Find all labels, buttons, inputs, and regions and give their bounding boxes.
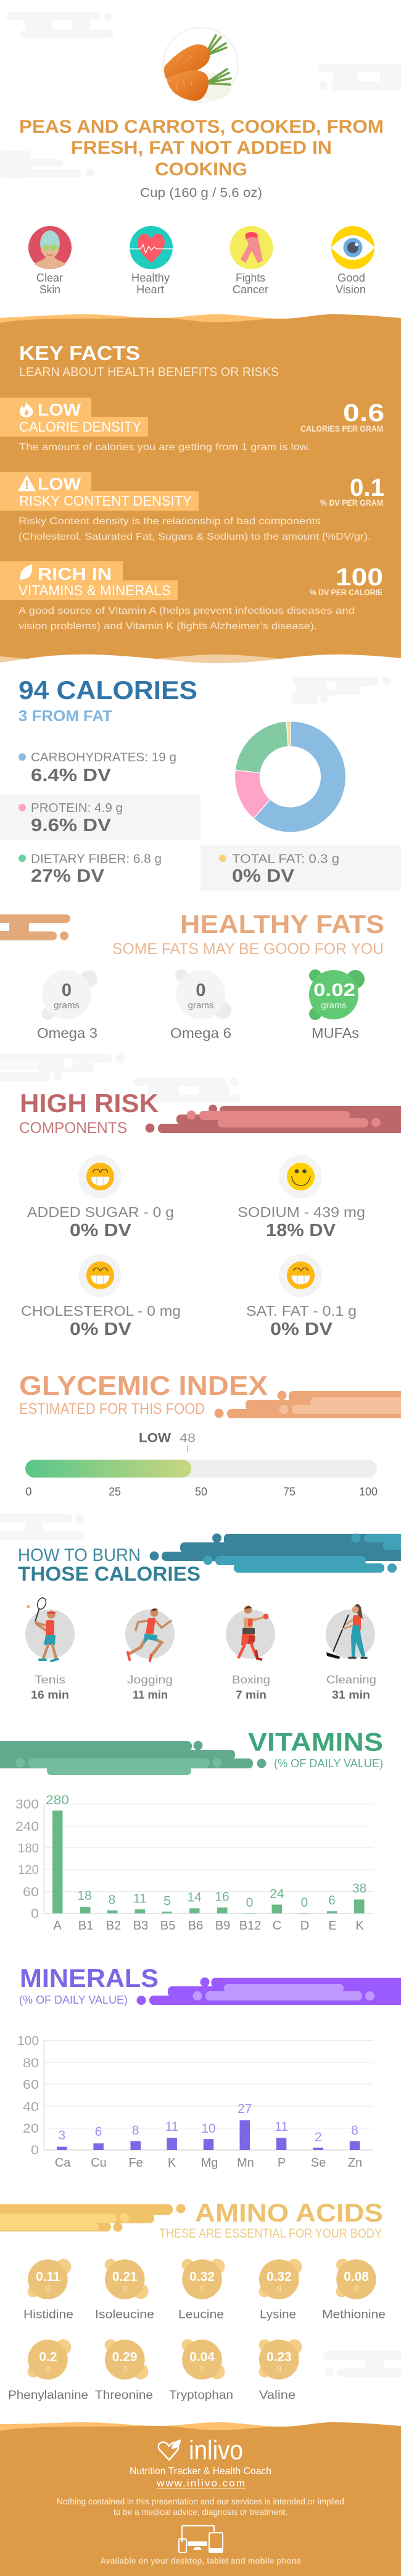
risk: sodium: SODIUM - 439 mg [238,1204,365,1220]
header background clouds [0,12,401,178]
bar chart: minerals: Zn [348,2156,362,2170]
bar chart: vitamins: A [53,1919,62,1933]
amino: valine [259,2339,302,2402]
amino: valine: Valine [259,2389,296,2402]
fat: omega 6: Omega 6 [170,1025,231,1041]
amino: isoleucine [95,2259,154,2321]
subheading: components: COMPONENTS [19,1119,127,1137]
amino: phenylalanine: Phenylalanine [8,2389,88,2402]
activity: boxing [226,1605,275,1701]
fact: calorie density: CALORIES PER GRAM [300,424,383,433]
calories section clouds [292,677,391,704]
benefit: clear skin [28,226,72,296]
bar chart: vitamins: B3 [133,1919,148,1933]
activity: jogging: 11 min [133,1689,168,1701]
title: PEAS AND CARROTS, COOKED, FROM [19,117,384,137]
amino: phenylalanine [8,2339,88,2402]
subheading: 3 from fat: 3 FROM FAT [19,708,112,725]
macro: dietary fiber [19,852,162,886]
section banner: burn calories [149,1534,401,1573]
amino: lysine: g [276,2282,281,2292]
activity: jogging: Jogging [127,1673,173,1686]
fat: mufas: grams [321,1000,347,1011]
bar chart: minerals: 8 [351,2123,358,2138]
section banner: amino acids [0,2204,185,2231]
risk: cholesterol: 0% DV [70,1319,132,1339]
title: COOKING [155,159,247,180]
amino: lysine [259,2259,302,2321]
amino: phenylalanine: 0.2 [39,2350,57,2364]
heading: key facts: KEY FACTS [19,342,140,364]
risk: sodium [238,1155,365,1240]
glycemic index gauge [25,1431,378,1498]
donut chart [235,721,346,832]
benefit: healthy heart [130,226,173,296]
amino: leucine: g [200,2282,204,2292]
fact: risky content density: RISKY CONTENT DENSITY [19,493,192,509]
bar chart: vitamins: C [273,1919,281,1933]
bar chart: vitamins: 280 [46,1793,69,1807]
section banner: minerals [137,1977,401,2005]
bar chart: vitamins: B1 [78,1919,93,1933]
amino: leucine: Leucine [178,2308,224,2321]
benefit: clear skin: Skin [39,283,60,296]
bar chart: minerals: K [168,2156,176,2170]
risk: saturated fat [246,1254,357,1339]
subheading: key facts: LEARN ABOUT HEALTH BENEFITS OR RISKS [19,366,279,379]
availability note: Available on your desktop, tablet and mobile phone [100,2556,301,2566]
heading: how to burn: HOW TO BURN [18,1545,141,1565]
subheading: vitamins: (% OF DAILY VALUE) [274,1757,383,1770]
heading: those calories: THOSE CALORIES [18,1563,200,1585]
fat: mufas: MUFAs [312,1025,359,1041]
bar chart: minerals: 2 [315,2130,322,2144]
bar chart: vitamins: 8 [109,1893,115,1907]
benefit: good vision: Vision [336,283,366,296]
amino: methionine [322,2259,386,2321]
bar chart: vitamins: 0 [246,1896,253,1910]
activity: jogging [125,1608,175,1701]
benefit: fights cancer: Fights [236,272,265,284]
bar chart: minerals: 6 [95,2125,102,2139]
glycemic index gauge: 50 [195,1486,207,1498]
bar chart: vitamins: 14 [187,1890,202,1904]
subheading: minerals: (% OF DAILY VALUE) [19,1994,128,2006]
activity: tennis [25,1597,75,1701]
amino: leucine [178,2259,225,2321]
tagline: Nutrition Tracker & Health Coach [130,2466,271,2477]
section banner: healthy fats [0,914,70,940]
bar chart: minerals: 40 [23,2100,39,2114]
bar chart: vitamins: K [355,1919,364,1933]
heading: healthy fats: HEALTHY FATS [180,910,384,939]
benefit: good vision [331,226,374,296]
fat: omega 6 [170,969,231,1041]
bar chart: vitamins: B5 [160,1919,175,1933]
fact: rich in vitamins and minerals: A good source of Vitamin A (helps prevent infectious diseases and [19,606,355,616]
bar chart: minerals: 27 [238,2102,252,2116]
macro: carbohydrates: 6.4% DV [31,766,112,785]
panel: key facts [0,314,401,663]
amino: histidine [23,2259,73,2321]
amino: histidine: 0.11 [36,2270,60,2284]
bar chart: minerals: Se [311,2156,326,2170]
benefit: clear skin: Clear [36,272,63,284]
burn section cloud [0,1514,86,1540]
macro: total fat: TOTAL FAT: 0.3 g [232,852,339,866]
glycemic index gauge: 100 [359,1486,378,1498]
section banner: high risk [146,1105,401,1133]
amino section cloud [323,2351,401,2377]
bar chart: vitamins: 6 [328,1893,336,1908]
heading: glycemic index: GLYCEMIC INDEX [19,1371,268,1401]
amino: tryptophan: 0.04 [189,2350,215,2364]
amino: threonine: 0.29 [112,2350,137,2364]
bar chart: vitamins [15,1793,373,1933]
amino: valine: 0.23 [267,2350,292,2364]
risk: added sugar: ADDED SUGAR - 0 g [27,1204,174,1220]
activity: cleaning [326,1604,376,1701]
amino: histidine: g [46,2282,50,2292]
amino: methionine: Methionine [322,2308,386,2321]
bar chart: minerals: Mg [201,2156,218,2170]
activity: boxing: 7 min [236,1689,267,1701]
high risk clouds [0,1054,241,1103]
risk: added sugar [27,1155,174,1240]
benefit: fights cancer: Cancer [233,283,268,296]
fact: calorie density: CALORIE DENSITY [19,419,141,435]
amino: tryptophan [169,2339,233,2402]
risk: saturated fat: 0% DV [270,1319,333,1339]
fact: calorie density: The amount of calories you are getting from 1 gram is low. [19,442,310,453]
fact: rich in vitamins and minerals: RICH IN [38,564,112,583]
macro: carbohydrates: CARBOHYDRATES: 19 g [31,751,176,764]
amino: isoleucine: 0.21 [112,2270,138,2284]
heading: amino acids: AMINO ACIDS [195,2198,383,2227]
fat: mufas: 0.02 [313,981,355,1000]
bar chart: vitamins: B6 [188,1919,203,1933]
amino: isoleucine: g [122,2282,127,2292]
fact: risky content density [0,472,384,542]
risk: saturated fat: SAT. FAT - 0.1 g [246,1303,357,1319]
subheading: healthy fats: SOME FATS MAY BE GOOD FOR YOU [112,940,384,958]
amino: phenylalanine: g [46,2362,50,2372]
amino: lysine: 0.32 [267,2270,292,2284]
amino: isoleucine: Isoleucine [95,2308,154,2321]
food image: carrots [163,27,238,102]
bar chart: minerals: 0 [31,2143,39,2157]
risk: cholesterol: CHOLESTEROL - 0 mg [21,1303,181,1319]
bar chart: vitamins: B9 [215,1919,230,1933]
amino: valine: g [276,2362,281,2372]
bar chart: vitamins: 300 [15,1797,39,1812]
section banner: vitamins [0,1741,267,1775]
heading: high risk: HIGH RISK [20,1089,159,1118]
macro: total fat: 0% DV [232,866,295,886]
glycemic index gauge: 25 [109,1486,121,1498]
bar chart: minerals: 11 [165,2120,179,2134]
bar chart: minerals: 100 [17,2034,39,2048]
bar chart: minerals [17,2034,373,2170]
disclaimer: to be a medical advice, diagnosis or treatment. [114,2507,287,2517]
benefit: healthy heart: Healthy [131,272,170,284]
bar chart: minerals: 11 [275,2120,288,2134]
bar chart: vitamins: D [300,1919,309,1933]
bar chart: minerals: Fe [128,2156,143,2170]
fact: risky content density: (Cholesterol, Saturated Fat, Sugars & Sodium) to the amount (%DV/gr). [19,532,371,542]
fact: risky content density: Risky Content density is the relationship of bad components [19,516,321,527]
amino: threonine [95,2339,153,2402]
title: FRESH, FAT NOT ADDED IN [71,138,332,158]
serving size: Cup (160 g / 5.6 oz) [140,186,262,200]
activity: boxing: Boxing [232,1673,270,1686]
fact: rich in vitamins and minerals: % DV PER CALORIE [310,588,382,597]
amino: tryptophan: g [200,2362,204,2372]
amino: tryptophan: Tryptophan [169,2389,233,2402]
fact: risky content density: % DV PER GRAM [320,498,383,508]
section banner: glycemic index [215,1390,401,1418]
bar chart: vitamins: 0 [31,1907,39,1921]
macro: protein: 9.6% DV [31,816,112,835]
bar chart: vitamins: 24 [270,1887,284,1901]
logo: inlivo [159,2435,243,2465]
benefit: healthy heart: Heart [136,283,164,296]
bar chart: vitamins: 16 [215,1889,229,1904]
bar chart: minerals: Ca [55,2156,71,2170]
activity: tennis: 16 min [31,1689,69,1701]
fat: omega 6: grams [188,1000,213,1011]
bar chart: vitamins: 18 [77,1889,92,1903]
amino: threonine: g [122,2362,127,2372]
disclaimer: Nothing contained in this presentation and our services is intended or implied [57,2496,344,2506]
disclaimer [57,2496,344,2517]
macro: protein: PROTEIN: 4.9 g [31,801,123,815]
activity: cleaning: 31 min [332,1689,370,1701]
bar chart: vitamins: 120 [18,1863,39,1877]
risk: cholesterol [21,1254,181,1339]
bar chart: vitamins: B2 [106,1919,121,1933]
amino: lysine: Lysine [260,2308,296,2321]
subheading: estimated: ESTIMATED FOR THIS FOOD [19,1400,205,1418]
macro: total fat [200,845,401,891]
fat: omega 6: 0 [196,981,206,1000]
website link: www.inlivo.com [156,2477,245,2489]
heading: minerals: MINERALS [20,1963,159,1993]
fat: omega 3 [37,970,97,1041]
panel: footer [0,2422,401,2576]
fat: omega 3: grams [54,1000,80,1011]
benefit: fights cancer [229,226,273,296]
amino: histidine: Histidine [23,2308,73,2321]
risk: added sugar: 0% DV [70,1221,132,1240]
bar chart: vitamins: 240 [15,1820,39,1834]
macro: dietary fiber: DIETARY FIBER: 6.8 g [31,852,162,866]
activity: tennis: Tenis [35,1673,65,1686]
fact: rich in vitamins and minerals: vision problems) and Vitamin K (fights Alzheimer’s disease). [19,621,317,632]
fact: rich in vitamins and minerals [0,561,383,632]
amino: methionine: g [354,2282,358,2292]
fact: risky content density: LOW [38,474,81,493]
fat: omega 3: Omega 3 [37,1025,97,1041]
fat: omega 3: 0 [62,981,72,1000]
bar chart: minerals: 60 [23,2078,39,2092]
bar chart: minerals: 80 [23,2056,39,2070]
fact: calorie density: 0.6 [343,399,384,427]
logo: inlivo: inlivo [189,2435,243,2465]
macro: carbohydrates [19,751,176,785]
bar chart: vitamins: B12 [239,1919,261,1933]
fat: mufas [309,969,365,1041]
bar chart: minerals: 20 [23,2122,39,2136]
fact: risky content density: 0.1 [350,474,384,501]
fact: rich in vitamins and minerals: 100 [336,564,383,591]
benefit: good vision: Good [337,272,365,284]
bar chart: vitamins: 180 [18,1841,39,1855]
macro: protein [0,795,200,840]
title [19,117,384,180]
glycemic index gauge: 0 [26,1486,32,1498]
bar chart: minerals: P [278,2156,286,2170]
amino: leucine: 0.32 [189,2270,215,2284]
bar chart: vitamins: 0 [301,1896,308,1910]
bar chart: vitamins: 11 [133,1891,147,1905]
bar chart: minerals: Cu [91,2156,107,2170]
fact: calorie density [0,398,384,453]
bar chart: vitamins: E [328,1919,337,1933]
bar chart: minerals: 10 [201,2122,216,2136]
bar chart: minerals: 3 [58,2128,65,2143]
bar chart: minerals: 8 [132,2123,139,2138]
glycemic index gauge: 75 [283,1486,296,1498]
fact: calorie density: LOW [38,400,81,419]
fact: rich in vitamins and minerals: VITAMINS & MINERALS [19,582,171,598]
activity: cleaning: Cleaning [326,1673,376,1686]
heading: vitamins: VITAMINS [248,1728,383,1756]
bar chart: vitamins: 5 [163,1894,171,1908]
risk: sodium: 18% DV [266,1221,336,1240]
glycemic index gauge: 48 [180,1432,196,1445]
bar chart: minerals: Mn [237,2156,254,2170]
bar chart: vitamins: 38 [352,1881,366,1896]
macro: dietary fiber: 27% DV [31,866,105,886]
amino: threonine: Threonine [95,2389,153,2402]
heading: 94 calories: 94 CALORIES [19,675,197,705]
bar chart: vitamins: 60 [23,1885,39,1899]
icon: devices [179,2525,223,2553]
amino: methionine: 0.08 [344,2270,369,2284]
glycemic index gauge: LOW [139,1431,171,1445]
